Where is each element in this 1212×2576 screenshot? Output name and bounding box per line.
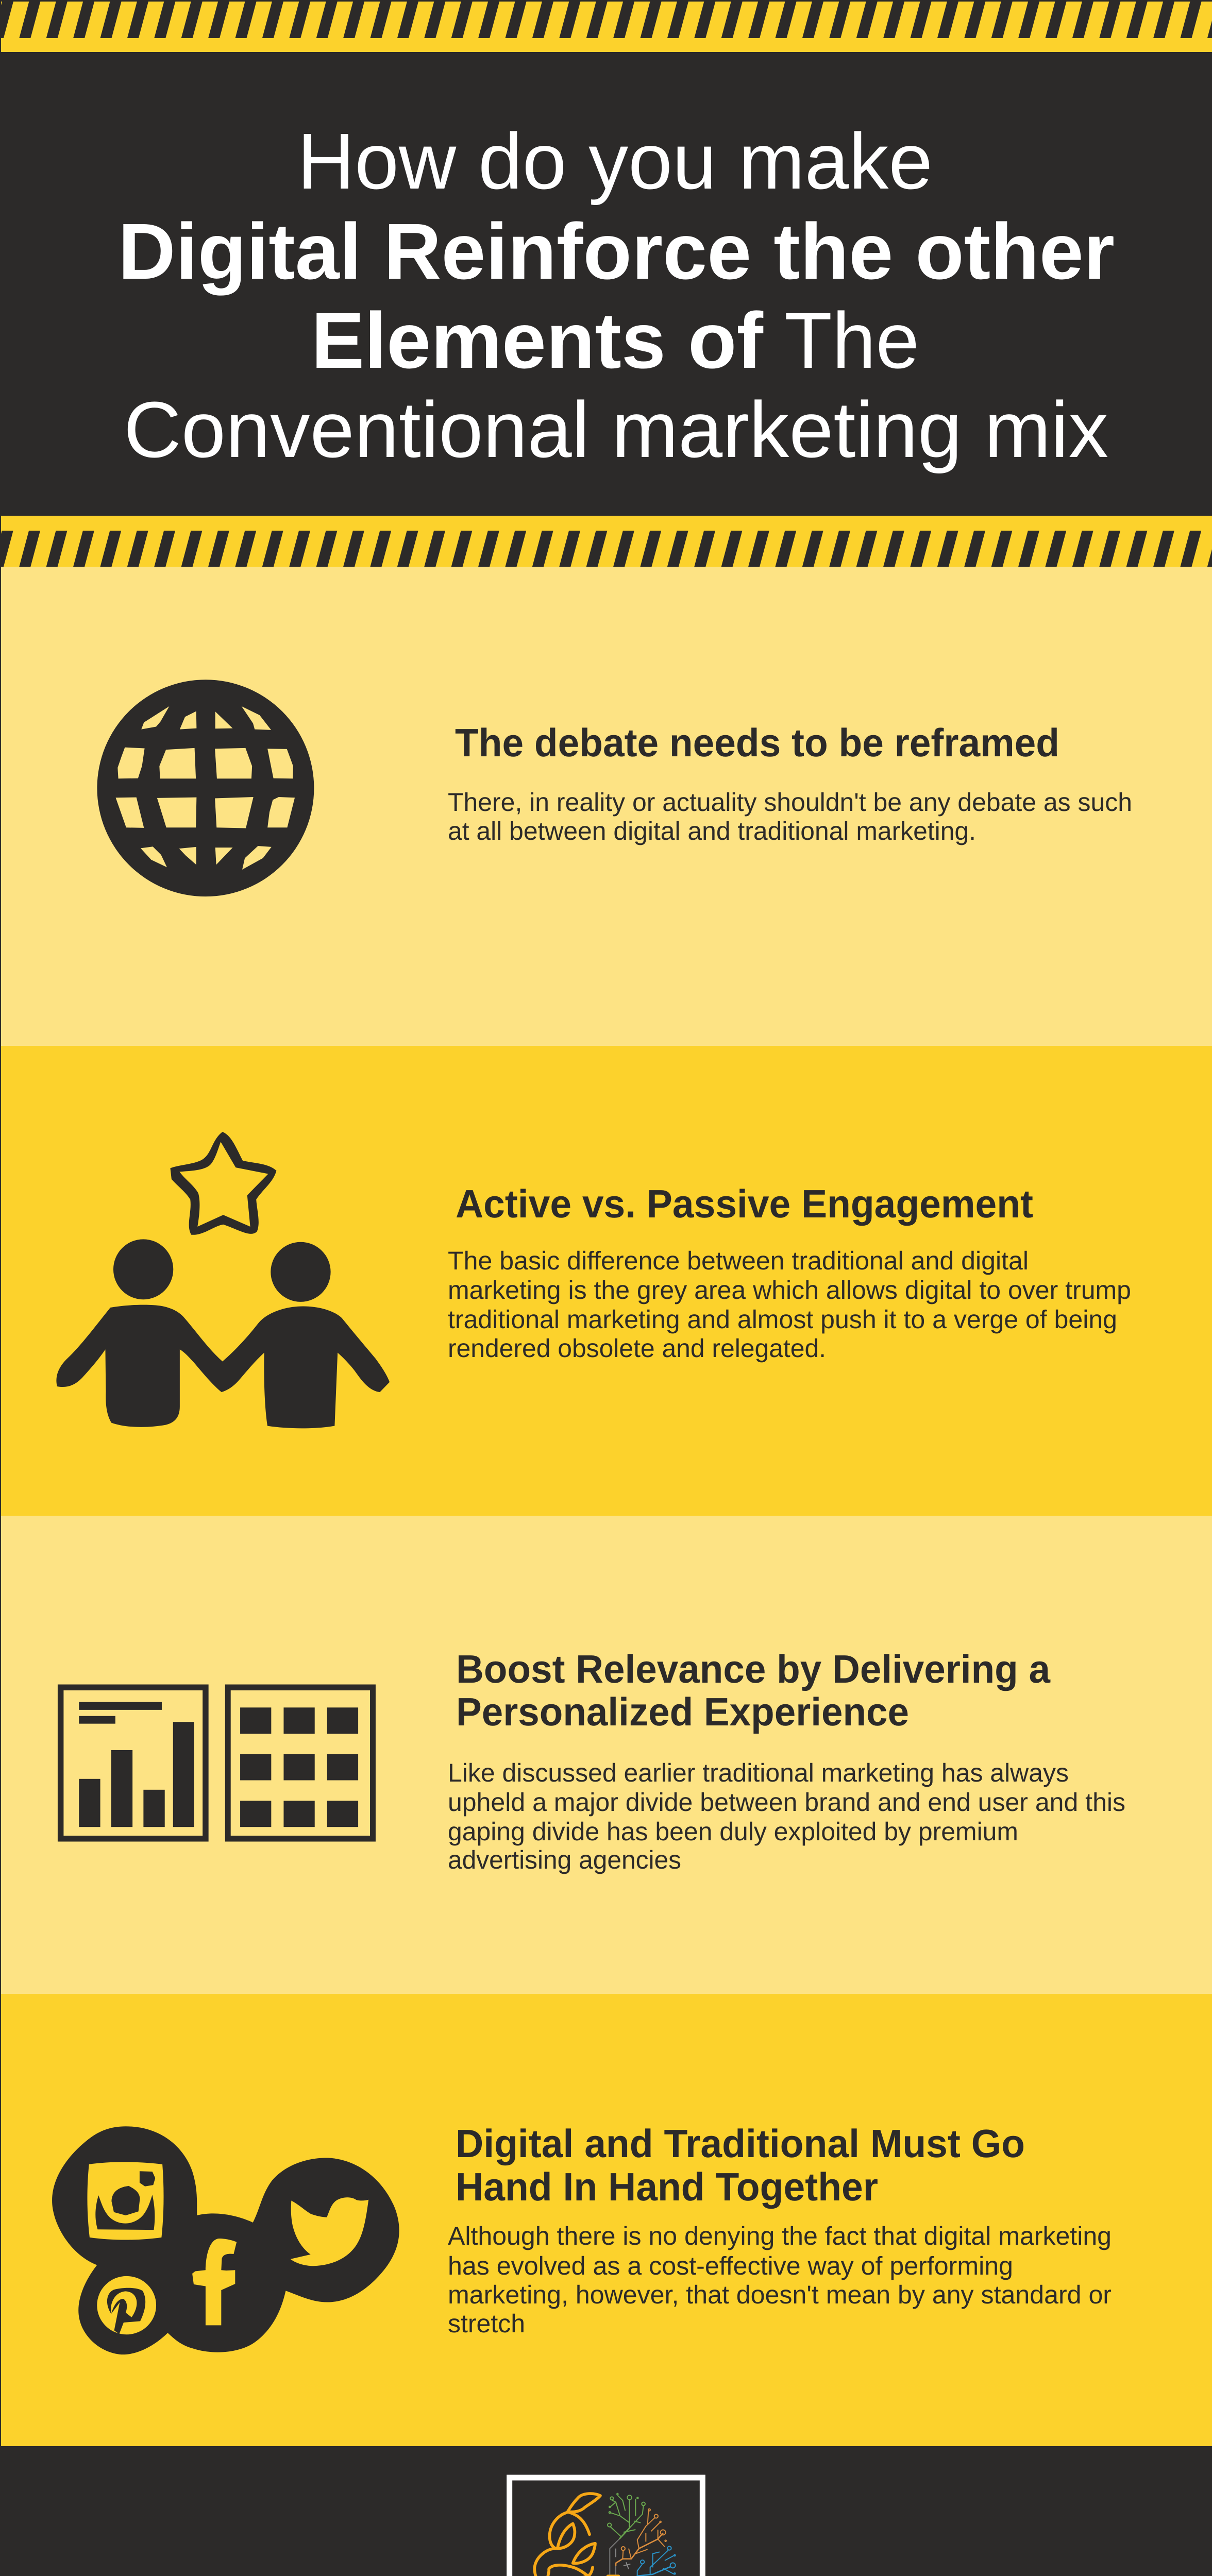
body text: marketing is the grey area which allows digital to over trump [448, 1276, 1131, 1304]
icon: social media bubbles [52, 2126, 399, 2354]
icon: chip connector [607, 2574, 620, 2576]
body text [448, 1246, 1131, 1363]
body text: gaping divide has been duly exploited by premium [448, 1817, 1018, 1846]
lower hazard stripe band [0, 516, 1212, 567]
body text: has evolved as a cost-effective way of performing [448, 2251, 1013, 2280]
icon: chart and table documents [58, 1685, 376, 1841]
panel: boost relevance [1, 1516, 1212, 1994]
body text: stretch [448, 2309, 525, 2338]
body text: The basic difference between traditional and digital [448, 1246, 1029, 1275]
heading: Digital and Traditional Must Go [456, 2122, 1025, 2166]
title: Digital Reinforce the other [118, 207, 1115, 296]
heading: Boost Relevance by Delivering a [456, 1647, 1051, 1691]
title: Conventional marketing mix [124, 385, 1108, 474]
top hazard stripe band [0, 2, 1212, 52]
body text: traditional marketing and almost push it to a verge of being [448, 1305, 1117, 1334]
body text [448, 788, 1132, 845]
body text [448, 2222, 1112, 2338]
panel: digital and traditional [1, 1994, 1212, 2446]
heading: Personalized Experience [456, 1690, 909, 1734]
logo: brain in white frame [510, 2478, 702, 2576]
icon: orange left brain [534, 2494, 602, 2576]
body text: at all between digital and traditional marketing. [448, 817, 976, 845]
body text: upheld a major divide between brand and end user and this [448, 1788, 1125, 1817]
heading [456, 1647, 1051, 1734]
icon: coloured circuit right brain [608, 2494, 676, 2576]
body text: Although there is no denying the fact that digital marketing [448, 2222, 1112, 2250]
title [118, 117, 1115, 474]
body text: Like discussed earlier traditional marketing has always [448, 1758, 1069, 1787]
body text: rendered obsolete and relegated. [448, 1334, 826, 1363]
heading: Hand In Hand Together [456, 2165, 878, 2209]
body text [448, 1758, 1125, 1874]
panel: active vs. passive engagement [1, 1046, 1212, 1516]
heading: Active vs. Passive Engagement [456, 1182, 1033, 1226]
panel: the debate needs to be reframed [1, 567, 1212, 1046]
icon: globe [97, 680, 314, 896]
body text: There, in reality or actuality shouldn't be any debate as such [448, 788, 1132, 817]
title: The [784, 296, 919, 385]
title: Elements of [311, 296, 764, 385]
title: How do you make [297, 117, 933, 206]
body text: marketing, however, that doesn't mean by any standard or [448, 2280, 1112, 2309]
heading [456, 2122, 1025, 2209]
icon: two people and star [56, 1132, 390, 1428]
body text: advertising agencies [448, 1845, 681, 1874]
heading: The debate needs to be reframed [455, 721, 1059, 765]
